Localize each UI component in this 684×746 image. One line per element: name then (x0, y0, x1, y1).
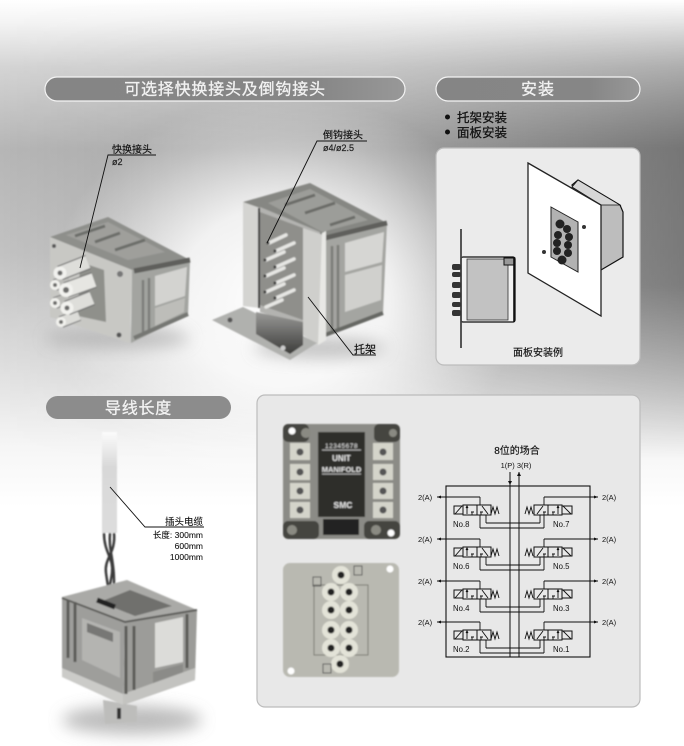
photo: manifold top view (283, 424, 400, 539)
valve row: No.2 and No.1: No.2 (453, 645, 469, 654)
callout: bracket (308, 297, 376, 356)
heading: lead wire length (46, 396, 231, 419)
valve row: No.6 and No.5: 2(A) (602, 535, 617, 544)
callout: one-touch fitting: ø2 (112, 157, 123, 167)
photo: manifold port side (283, 563, 399, 677)
label: manifold print (322, 443, 362, 510)
circuit diagram: 8-station manifold (418, 444, 617, 657)
circuit diagram: 8-station manifold: 1(P) 3(R) (501, 461, 532, 470)
drawing: side view (452, 229, 515, 348)
fittings: one-touch cylinders (55, 262, 94, 322)
callout: plug cable lengths: 1000mm (170, 552, 203, 562)
valve row: No.6 and No.5: No.5 (553, 562, 570, 571)
valve row: No.4 and No.3: 2(A) (418, 577, 433, 586)
heading: selectable fittings (45, 77, 405, 101)
callout: plug cable lengths: 600mm (175, 541, 203, 551)
valve row: No.8 and No.7: 2(A) (418, 493, 433, 502)
valve row: No.2 and No.1: 2(A) (602, 618, 617, 627)
bullet list: mounting types: 托架安装 (457, 110, 507, 125)
callout: barb fitting: 倒钩接头 (323, 128, 363, 142)
valve row: No.8 and No.7: No.8 (453, 520, 469, 529)
valve row: No.4 and No.3 (418, 577, 617, 613)
label: manifold print: MANIFOLD (322, 465, 362, 474)
valve row: No.2 and No.1 (418, 618, 617, 654)
callout: plug cable lengths: 长度: 300mm (153, 530, 203, 540)
valve row: No.6 and No.5: 2(A) (418, 535, 433, 544)
circuit diagram: 8-station manifold: 8位的场合 (494, 444, 540, 457)
panel: manifold photos and circuit (257, 395, 640, 707)
heading: lead wire length: 导线长度 (105, 400, 172, 418)
valve row: No.8 and No.7: No.7 (553, 520, 569, 529)
panel: panel mounting example (436, 148, 640, 365)
valve row: No.8 and No.7: 2(A) (602, 493, 617, 502)
callout: bracket: 托架 (354, 342, 376, 356)
valve row: No.4 and No.3: No.4 (453, 604, 470, 613)
product photo: module with one-touch fittings (46, 217, 190, 348)
heading: mounting: 安装 (521, 80, 555, 98)
label: manifold print: UNIT (332, 454, 351, 463)
label: manifold print: 12345678 (325, 443, 358, 450)
valve row: No.8 and No.7 (418, 493, 617, 529)
heading: mounting (436, 77, 640, 101)
drawing: panel isometric view (528, 163, 623, 316)
valve row: No.6 and No.5 (418, 535, 617, 571)
valve row: No.2 and No.1: No.1 (553, 645, 569, 654)
product photo: module with barb fittings and bracket (212, 183, 387, 360)
callout: one-touch fitting (80, 143, 156, 268)
bullet list: mounting types: 面板安装 (457, 125, 507, 140)
page background gradient (0, 6, 684, 460)
valve row: No.4 and No.3: 2(A) (602, 577, 617, 586)
heading: selectable fittings: 可选择快换接头及倒钩接头 (124, 80, 326, 98)
valve row: No.4 and No.3: No.3 (553, 604, 569, 613)
callout: plug cable lengths (110, 487, 204, 562)
callout: barb fitting (267, 128, 367, 243)
product photo: module with plug cable (62, 432, 202, 734)
callout: plug cable lengths: 插头电缆 (165, 516, 203, 528)
caption: panel mounting example: 面板安装例 (513, 346, 563, 359)
callout: barb fitting: ø4/ø2.5 (323, 143, 354, 153)
label: manifold print: SMC (334, 500, 352, 510)
callout: one-touch fitting: 快换接头 (112, 143, 152, 156)
bullet list: mounting types (445, 110, 507, 140)
valve row: No.2 and No.1: 2(A) (418, 618, 433, 627)
valve row: No.6 and No.5: No.6 (453, 562, 469, 571)
